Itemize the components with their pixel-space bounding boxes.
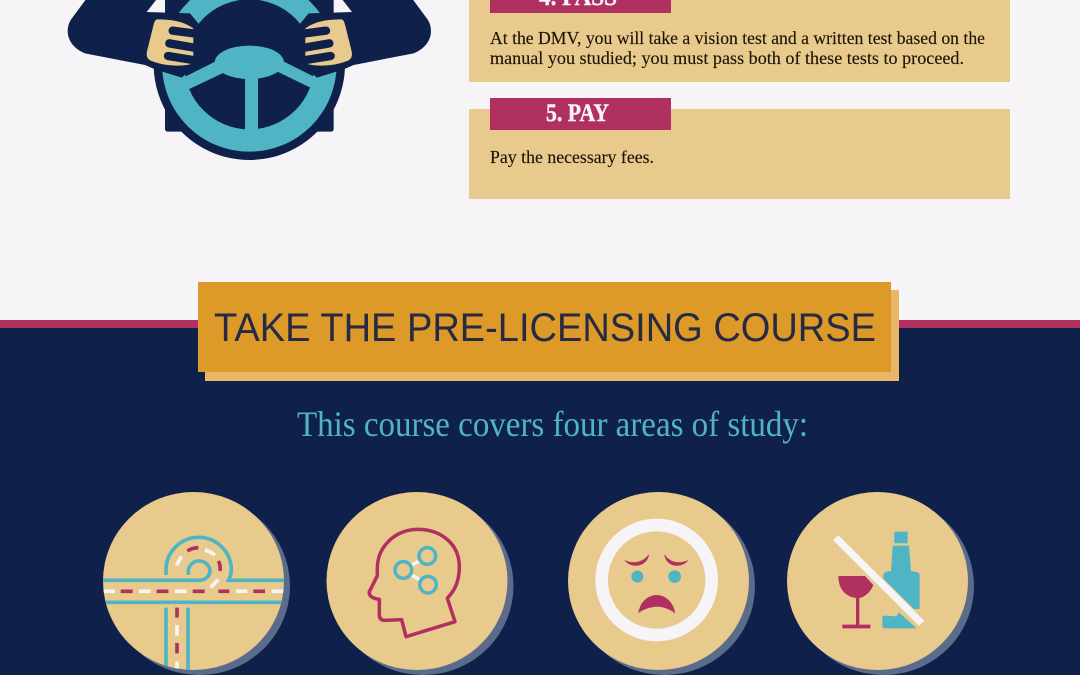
left arm and hand [68, 0, 198, 78]
steering wheel [154, 0, 345, 160]
wine glass [838, 576, 873, 628]
right arm and hand [300, 0, 431, 78]
panel: step 5 pay [469, 98, 1010, 199]
panel: step 4 pass [469, 0, 1010, 82]
step 5 heading tab [490, 98, 671, 130]
icon: head with connected nodes [326, 492, 514, 675]
driver torso [165, 0, 334, 132]
icon: driver holding steering wheel [68, 0, 431, 160]
step 5 body text: Pay the necessary fees. [490, 147, 654, 167]
step 5 heading tab: 5. PAY [546, 100, 609, 127]
prohibition slash [836, 538, 922, 623]
heading banner: take the pre-licensing course [198, 282, 899, 381]
step 4 body text: At the DMV, you will take a vision test and a written test based on the [490, 28, 985, 48]
step 4 heading tab [490, 0, 671, 13]
icon: road interchange [100, 492, 290, 675]
icon: sad face [568, 492, 755, 675]
step 4 body text: manual you studied; you must pass both of these tests to proceed. [490, 48, 964, 68]
bottle [882, 532, 920, 628]
magenta divider stripe [0, 320, 1080, 328]
navy lower section background [0, 327, 1080, 675]
subheading: This course covers four areas of study: [297, 404, 808, 444]
icon: no alcohol [787, 492, 974, 675]
heading banner: take the pre-licensing course: TAKE THE PRE-LICENSING COURSE [214, 306, 876, 350]
